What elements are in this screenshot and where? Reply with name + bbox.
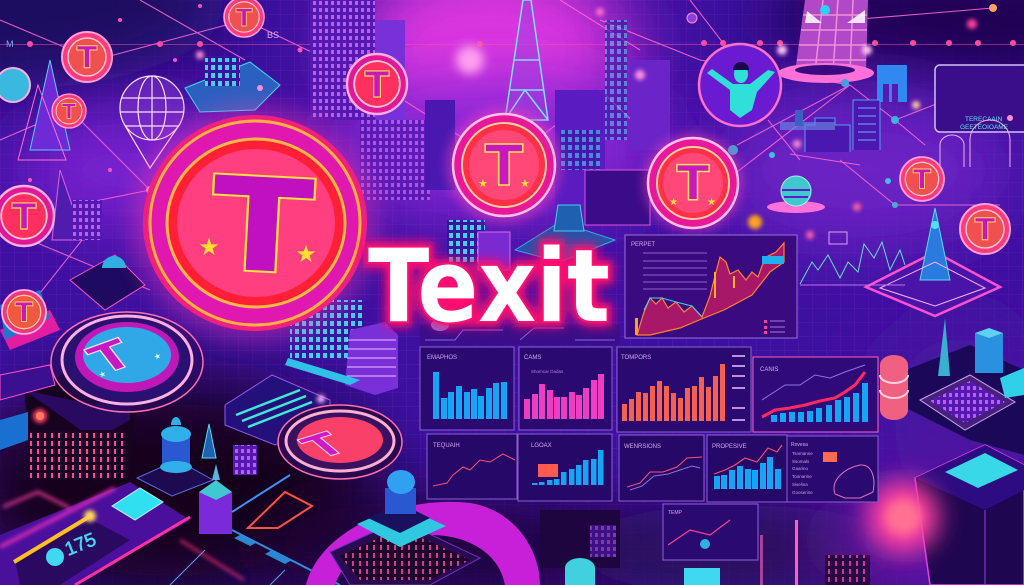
panel: legend with car sketch: Tsomanne [792,451,813,456]
top-right info panel [935,65,1024,167]
medium coin right: ★ [669,197,678,208]
callout [762,256,784,264]
skyline: buildings under main coin [285,300,398,395]
ring coin right: T [292,426,358,466]
network nodes [36,4,1013,420]
bottom-centre domed tower [306,470,540,585]
title: Texit [368,227,610,345]
panel: main price chart [625,235,797,338]
skyline: left upper platform [0,58,280,350]
small coin: T [12,197,37,238]
ring coin left: ★ [153,351,162,362]
medium coin centre: ★ [478,178,488,190]
ring coin left [51,312,203,412]
medium coin centre: ★ [520,178,530,190]
small coin: T [15,298,33,329]
circuit traces [170,475,340,585]
small coin [2,290,46,334]
panel: blue bars with callout [518,434,612,501]
dark lower-left block [0,360,135,485]
medium coin centre: T [485,134,523,199]
ring coin left: ★ [98,369,107,380]
text: small corner labels: BS [267,30,279,40]
small bottom labels and spires: TEMP [668,510,683,516]
icon: car outline [834,465,874,498]
small coin [52,94,86,128]
main coin [133,105,377,341]
star left: ★ [198,234,220,261]
top-right info panel: GEETEOIOAME [960,124,1009,131]
right mid platforms [880,318,1024,455]
small coin: T [62,99,76,123]
panel: orange bars [617,347,751,432]
text: panel heading: LGOAX [531,443,552,449]
icon: left eiffel towers [0,60,84,240]
small coin: T [913,165,931,196]
icon: crystal globe [767,176,825,213]
panel: pink bars: Shomcar Dadas [531,369,564,374]
text: counter reading: 175 [62,529,99,561]
text: panel heading: TEQUAIH [433,443,460,449]
price area [637,243,784,335]
icon: orange badge [823,452,837,462]
icon: hot-air balloon [120,76,184,168]
panel: line chart two [619,435,704,501]
text: panel heading: TOMPORS [621,355,651,361]
network lines [0,0,1024,312]
top-left vignette lights [28,4,302,182]
icon: teal beacon [137,417,213,496]
panel: legend with car sketch: Gaarino [792,466,809,471]
circuit platform [225,375,330,445]
panel: legend with car sketch: Siselina [792,482,808,487]
text: chart title: PERPET [631,242,655,248]
panel: blue bars [420,347,514,430]
text: panel heading: PROPESIVE [712,444,747,450]
star right: ★ [295,241,317,268]
main coin letter T: T [209,151,316,303]
text: small corner labels [6,30,279,49]
small coin [62,32,112,82]
main coin letter T: T [209,151,316,303]
icon: figure portrait [699,44,781,126]
icon: blue M block [877,65,907,102]
pink lens glow [867,481,939,553]
small coin [224,0,264,37]
panel: bars with trend [707,435,787,502]
top-right info panel: TERECAAIN [965,116,1003,123]
small coin: T [77,41,98,76]
callout [538,464,558,477]
panel: legend with car sketch: Ssomals [792,459,810,464]
medium coin right [643,133,743,233]
small bottom labels and spires [540,504,870,585]
horizontal light strip [0,40,1024,47]
small coin: T [365,65,390,106]
title: Texit [368,227,610,345]
bottom-left neon platform [0,482,190,585]
text: panel heading: CANIS [760,367,778,373]
small coin [900,157,944,201]
medium coin right: ★ [707,197,716,208]
icon: central spire [505,0,548,120]
text: small corner labels: M [6,39,14,49]
top-right tower on disc [778,0,874,83]
text: panel heading: Rovesa [791,442,808,448]
neon diamond platform with blue tower [866,208,1000,316]
bottom-right server cube [915,445,1024,585]
panel: legend with car sketch [787,436,878,502]
small coin [960,204,1010,254]
panel: combo chart [753,357,878,432]
small coin: T [975,213,996,248]
text: panel heading: EMAPHOS [427,355,457,361]
text: panel heading: WENRSIONS [624,444,661,450]
panel: legend with car sketch: Toonarine [792,474,812,479]
small coin [347,54,407,114]
wave line chart [800,232,905,285]
medium coin centre [446,107,562,223]
panel: line chart one [427,434,517,499]
small coin: T [236,4,253,32]
skyline: right-centre city outline [780,100,880,152]
ring coin right [278,405,402,479]
text: panel heading: CAMS [524,355,541,361]
panel: pink bars [519,347,612,430]
skyline: central towers [310,0,670,345]
small coin [0,186,54,246]
panel: legend with car sketch: Gooserine [792,490,813,495]
icon: mini towers [199,424,257,534]
ring coin left: T [79,331,145,383]
medium coin right: T [677,156,710,212]
